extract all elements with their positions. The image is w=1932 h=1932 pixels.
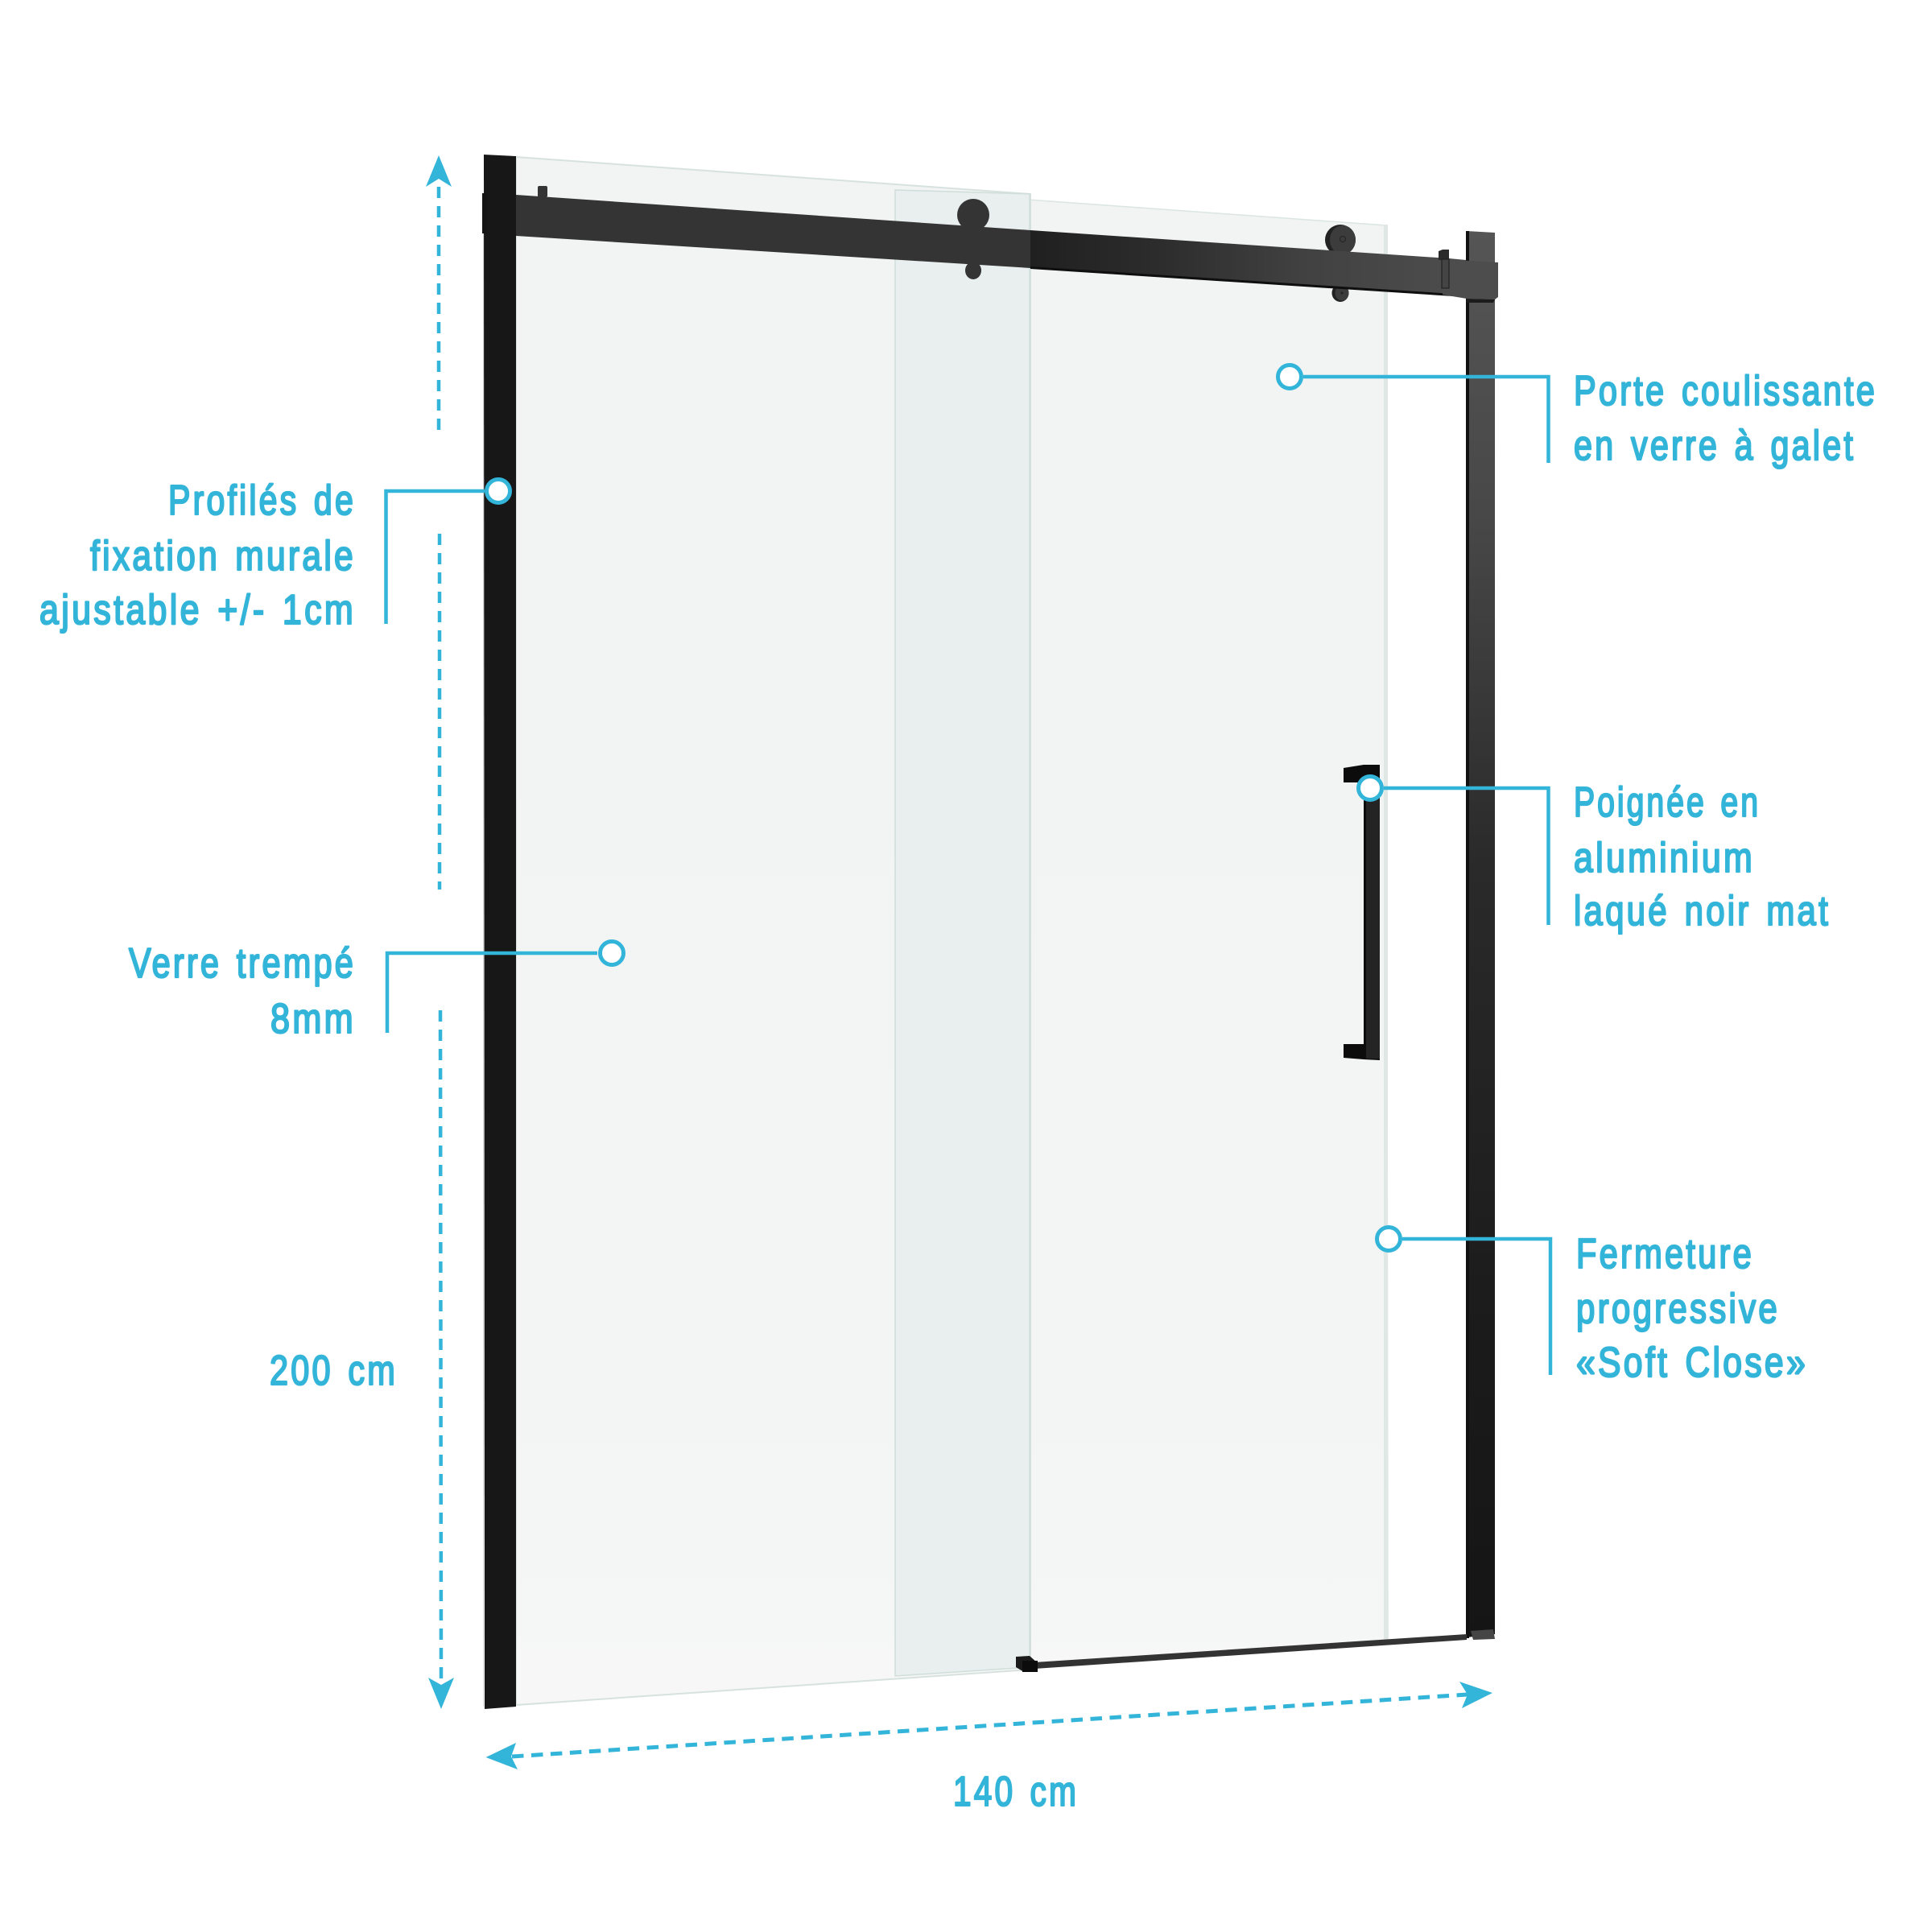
callout: sliding door bbox=[1278, 365, 1877, 469]
callout: soft close: progressive bbox=[1576, 1286, 1780, 1332]
callout: soft close bbox=[1377, 1227, 1808, 1386]
bottom guide block bbox=[1016, 1656, 1038, 1672]
fixed glass panel bbox=[516, 157, 1030, 1705]
callout: wall profile: fixation murale bbox=[90, 533, 356, 580]
callout: tempered glass bbox=[129, 940, 623, 1042]
callout: handle: aluminium bbox=[1574, 835, 1755, 881]
height label: 200 cm bbox=[270, 1348, 398, 1394]
shower door product bbox=[482, 155, 1498, 1709]
right wall profile bbox=[1466, 231, 1495, 1638]
height dimension arrow bbox=[426, 155, 454, 1709]
left wall profile bbox=[482, 155, 516, 1709]
left roller bbox=[957, 199, 989, 279]
right stopper bbox=[1439, 250, 1449, 288]
right rail mounting block bbox=[1443, 259, 1498, 303]
callout: wall profile: Profilés de bbox=[168, 477, 356, 524]
callout: handle bbox=[1359, 776, 1831, 935]
door handle bbox=[1344, 765, 1380, 1060]
callout: soft close: Fermeture bbox=[1576, 1231, 1754, 1278]
callout: tempered glass: Verre trempé bbox=[129, 940, 356, 987]
right profile foot bbox=[1471, 1629, 1495, 1640]
callout: soft close: «Soft Close» bbox=[1576, 1340, 1808, 1386]
overlap glass area bbox=[895, 190, 1030, 1676]
callout: handle: Poignée en bbox=[1574, 779, 1761, 826]
callout: tempered glass: 8mm bbox=[270, 996, 356, 1042]
rail lower shadow edge bbox=[1030, 266, 1466, 297]
callout: handle: laqué noir mat bbox=[1574, 888, 1831, 935]
right roller bbox=[1325, 225, 1356, 302]
sliding glass door panel bbox=[894, 190, 1388, 1676]
callout: sliding door: en verre à galet bbox=[1574, 423, 1856, 469]
left stopper bbox=[538, 186, 547, 197]
top rail right section bbox=[1030, 230, 1466, 296]
glass door right edge bbox=[1384, 225, 1388, 1640]
width label: 140 cm bbox=[953, 1769, 1079, 1815]
callout: wall profile: ajustable +/- 1cm bbox=[39, 587, 356, 634]
bottom track bbox=[1034, 1634, 1467, 1669]
top rail left section bbox=[516, 195, 1030, 268]
width dimension arrow bbox=[486, 1682, 1492, 1769]
callout: wall profile bbox=[39, 477, 510, 634]
